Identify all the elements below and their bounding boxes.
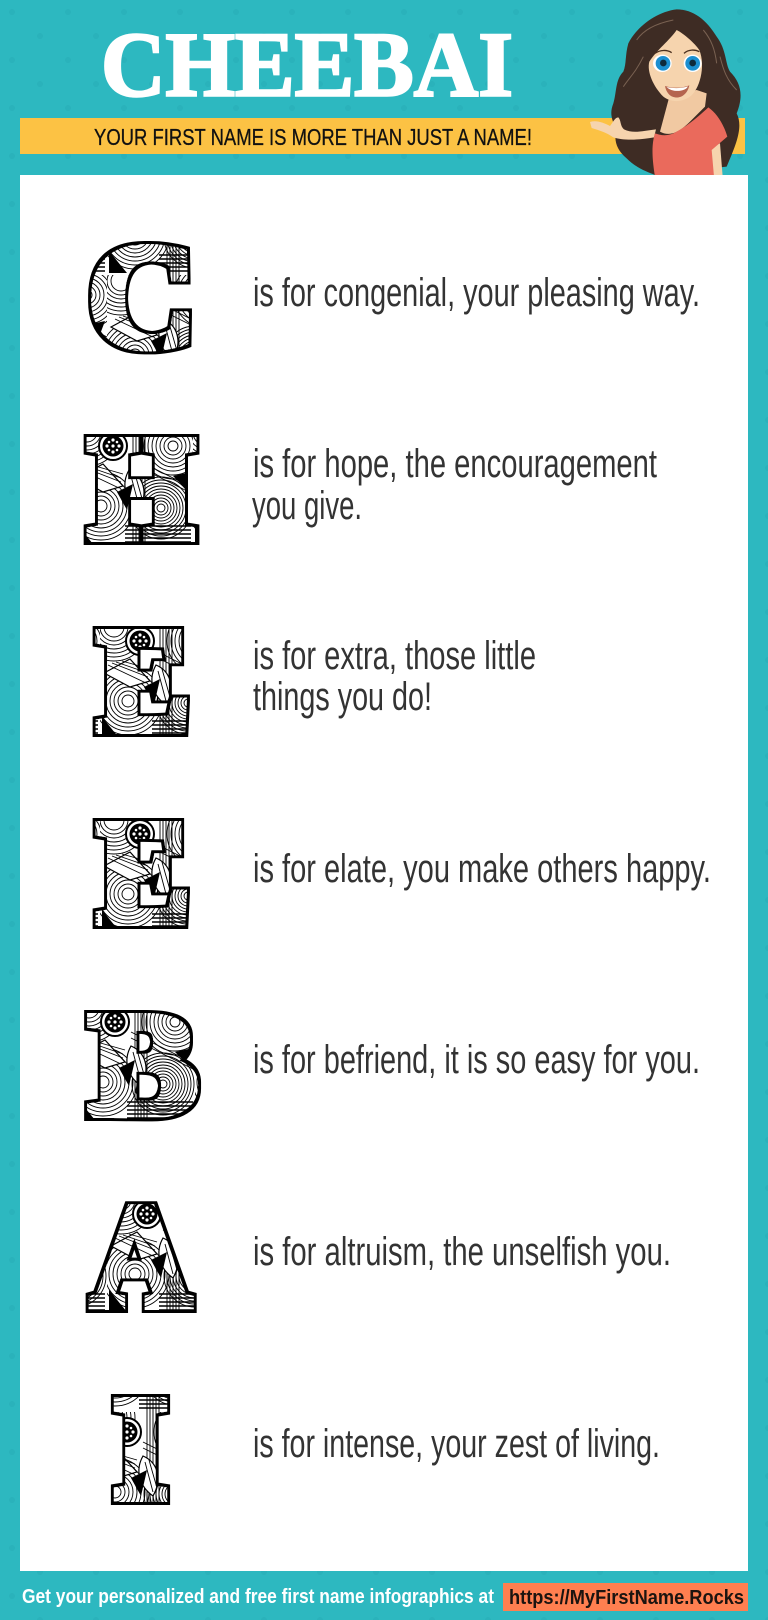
footer text: Get your personalized and free first name infographics at bbox=[22, 1586, 494, 1608]
row: A bbox=[92, 1177, 671, 1337]
text: E lines bbox=[253, 634, 536, 719]
row: E second bbox=[98, 793, 711, 953]
row: C bbox=[89, 217, 700, 377]
icon: mandala letter A: A bbox=[92, 1177, 190, 1337]
icon: mandala letter E: E bbox=[98, 601, 189, 761]
icon: mandala letter I: I bbox=[114, 1369, 167, 1529]
footer link badge: https://MyFirstName.Rocks bbox=[509, 1587, 744, 1609]
icon: mandala letter B: B bbox=[90, 985, 197, 1145]
icon: cartoon woman bbox=[590, 9, 741, 177]
banner: tagline bbox=[20, 118, 745, 154]
row: I bbox=[114, 1369, 660, 1529]
banner: tagline: YOUR FIRST NAME IS MORE THAN JUST A NAME! bbox=[94, 124, 532, 150]
row: B bbox=[90, 985, 700, 1145]
text: E lines: is for extra, those little bbox=[253, 634, 536, 678]
text: H lines: you give. bbox=[252, 484, 362, 528]
row: E bbox=[98, 601, 536, 761]
text: H lines bbox=[252, 442, 657, 528]
text: E lines: things you do! bbox=[253, 675, 432, 719]
row: H bbox=[89, 409, 657, 569]
title: CHEEBAI bbox=[101, 14, 513, 116]
icon: mandala letter C: C bbox=[89, 217, 195, 377]
icon: mandala letter E: E bbox=[98, 793, 189, 953]
icon: mandala letter H: H bbox=[89, 409, 194, 569]
